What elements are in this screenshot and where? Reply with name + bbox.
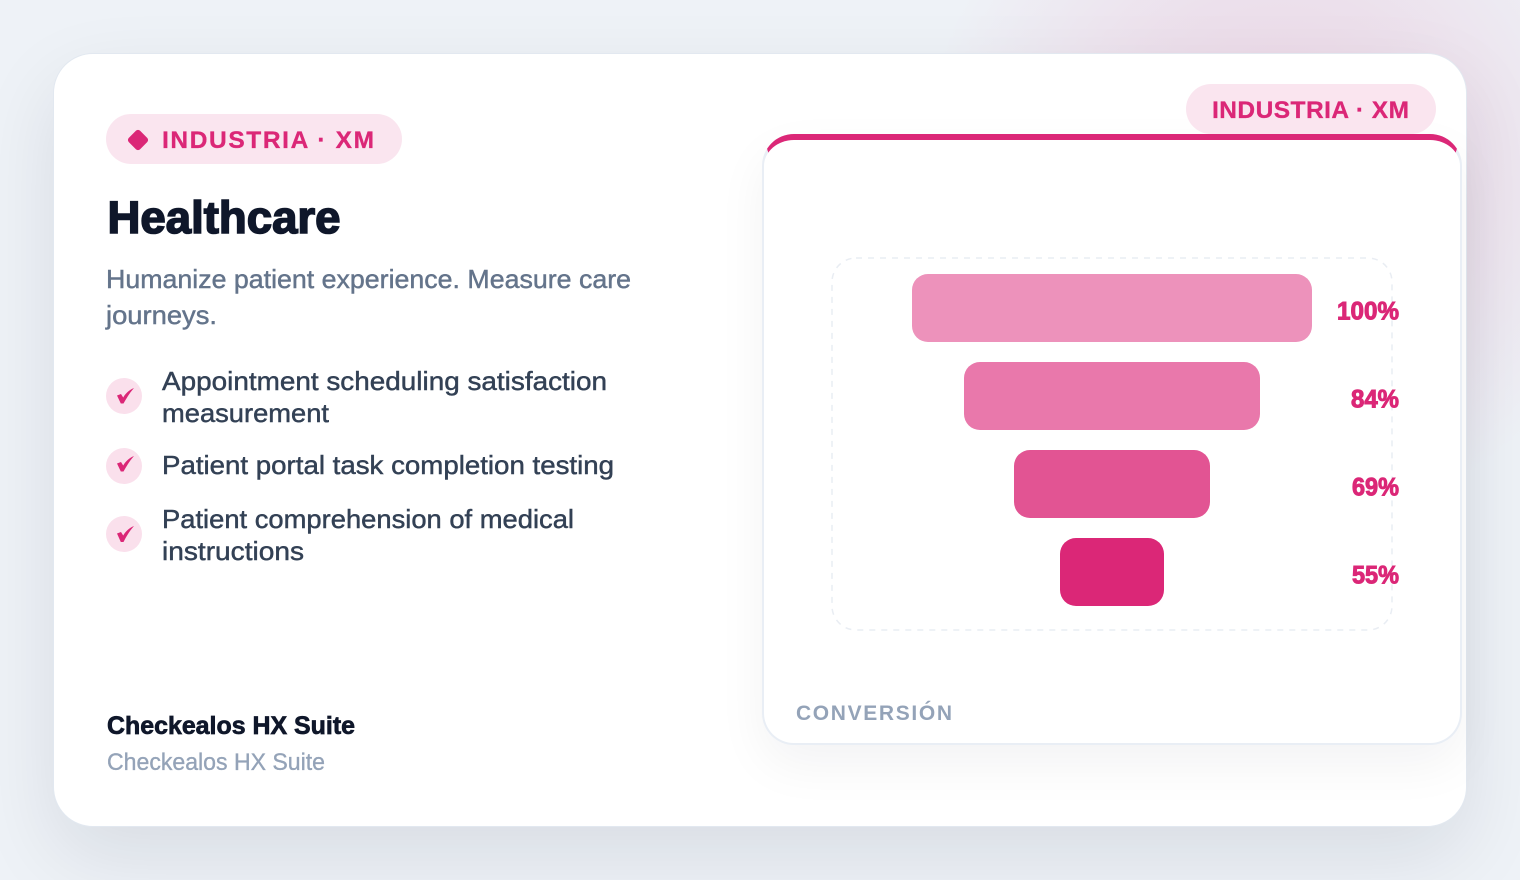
description	[105, 264, 631, 330]
footer: brand subtitle: Checkealos HX Suite	[107, 749, 325, 776]
icon: diamond	[127, 129, 149, 151]
badge: industry: INDUSTRIA · XM	[162, 127, 374, 154]
item: appointment scheduling	[106, 366, 607, 428]
value: 55%: 55%	[1352, 562, 1399, 590]
checklist	[106, 366, 614, 566]
panel: funnel chart card	[762, 134, 1462, 752]
item: appointment scheduling: measurement	[162, 398, 330, 428]
item: patient portal: Patient portal task completion testing	[162, 450, 614, 480]
bar: 84%	[964, 362, 1260, 430]
footer: brand name: Checkealos HX Suite	[107, 712, 355, 740]
value: 69%: 69%	[1352, 474, 1399, 502]
axis label: conversion: CONVERSIÓN	[796, 701, 952, 725]
description: Humanize patient experience. Measure care	[106, 264, 631, 294]
value: 84%: 84%	[1351, 386, 1399, 414]
bar: 100%	[912, 274, 1312, 342]
badge: industry	[106, 114, 402, 164]
funnel bars	[912, 274, 1312, 606]
bar: 69%	[1014, 450, 1210, 518]
title: Healthcare	[108, 192, 340, 243]
badge: chart top right: INDUSTRIA · XM	[1212, 97, 1409, 124]
funnel percentages	[1337, 298, 1399, 590]
item: patient comprehension: instructions	[162, 536, 304, 566]
item: patient portal	[106, 448, 614, 484]
value: 100%: 100%	[1337, 298, 1399, 326]
badge: chart top right	[1186, 84, 1436, 134]
description: journeys.	[105, 300, 217, 330]
item: patient comprehension: Patient comprehension of medical	[162, 504, 574, 534]
item: patient comprehension	[106, 504, 574, 566]
bar: 55%	[1060, 538, 1164, 606]
item: appointment scheduling: Appointment scheduling satisfaction	[162, 366, 607, 396]
